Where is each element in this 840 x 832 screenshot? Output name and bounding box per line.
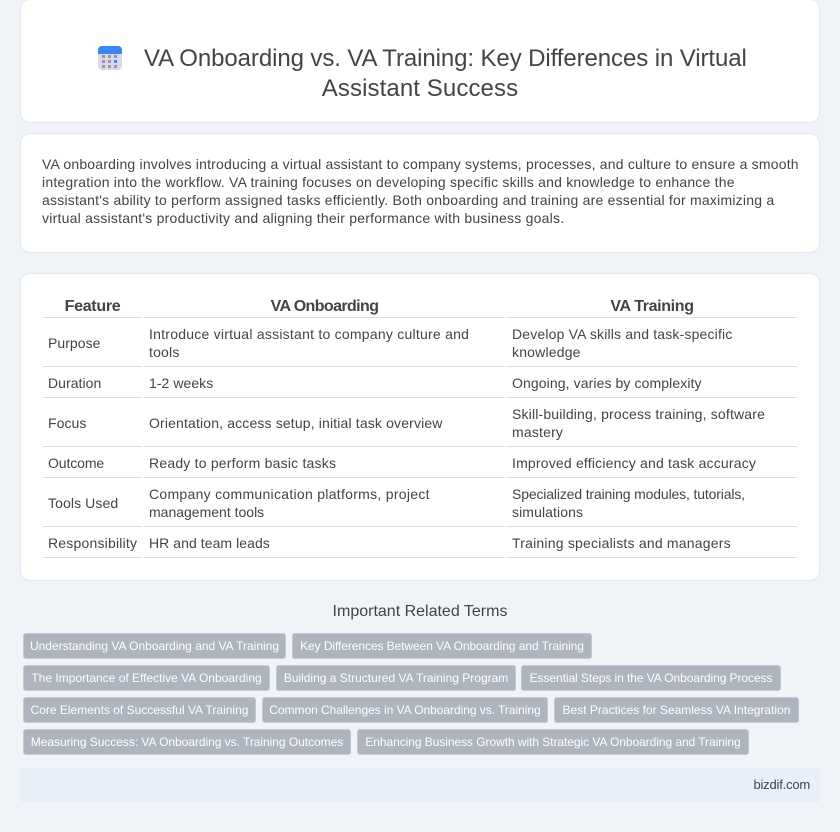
tag <box>23 697 256 723</box>
row: purpose: Introduce virtual assistant to company culture and <box>149 326 469 342</box>
tag: The Importance of Effective VA Onboarding <box>31 671 262 685</box>
tag: Core Elements of Successful VA Training <box>31 703 248 717</box>
intro text panel <box>20 133 820 253</box>
tag <box>357 729 749 755</box>
row: duration: Ongoing, varies by complexity <box>512 375 702 391</box>
row: focus: Orientation, access setup, initial task overview <box>149 415 443 431</box>
tag <box>276 665 516 691</box>
tag <box>23 729 351 755</box>
row: responsibility <box>48 535 731 551</box>
intro paragraph: virtual assistant's productivity and aligning their performance with business goals. <box>42 210 564 226</box>
title <box>144 45 747 102</box>
title: Assistant Success <box>322 75 518 102</box>
table header: VA training: VA Training <box>610 298 694 315</box>
table header: VA onboarding: VA Onboarding <box>271 298 378 315</box>
title: VA Onboarding vs. VA Training: Key Differences in Virtual <box>144 45 747 72</box>
row: duration: 1-2 weeks <box>149 375 213 391</box>
tag <box>262 697 548 723</box>
row: purpose: Develop VA skills and task-specific <box>512 326 732 342</box>
tag <box>521 665 781 691</box>
intro paragraph: VA onboarding involves introducing a virtual assistant to company systems, processes, and culture to ensure a smooth <box>42 156 799 172</box>
footer bar <box>20 768 820 802</box>
tag: Best Practices for Seamless VA Integration <box>563 703 790 717</box>
tag: Enhancing Business Growth with Strategic VA Onboarding and Training <box>365 735 741 749</box>
comparison table panel <box>20 273 820 581</box>
row: tools used: Specialized training modules, tutorials, <box>512 486 745 502</box>
row: purpose <box>48 326 732 360</box>
table header: feature: Feature <box>65 298 120 315</box>
related terms tags <box>23 633 799 755</box>
intro paragraph <box>42 156 799 226</box>
tag <box>23 665 270 691</box>
row: focus <box>48 406 765 440</box>
header card <box>20 0 820 123</box>
row: purpose: tools <box>149 344 180 360</box>
intro paragraph: integration into the workflow. VA training focuses on developing specific skills and knowledge to enhance the <box>42 174 735 190</box>
row: focus: mastery <box>512 424 563 440</box>
tag: Essential Steps in the VA Onboarding Process <box>530 671 772 685</box>
row: focus: Focus <box>48 415 86 431</box>
intro paragraph: assistant's ability to perform assigned tasks efficiently. Both onboarding and training are essential for maximizing a <box>42 192 774 208</box>
tag: Measuring Success: VA Onboarding vs. Training Outcomes <box>31 735 343 749</box>
tag <box>23 633 286 659</box>
row: outcome <box>48 455 756 471</box>
tag <box>554 697 799 723</box>
row: tools used <box>48 486 745 520</box>
row: tools used: Company communication platforms, project <box>149 486 430 502</box>
row: responsibility: HR and team leads <box>149 535 270 551</box>
row: tools used: simulations <box>512 504 583 520</box>
row: tools used: Tools Used <box>48 495 118 511</box>
icon: calendar <box>98 46 122 70</box>
row: focus: Skill-building, process training, software <box>512 406 765 422</box>
row: tools used: management tools <box>149 504 264 520</box>
row: outcome: Ready to perform basic tasks <box>149 455 336 471</box>
row: responsibility: Responsibility <box>48 535 137 551</box>
row: purpose: Purpose <box>48 335 100 351</box>
row: outcome: Outcome <box>48 455 104 471</box>
row: duration: Duration <box>48 375 101 391</box>
tag: Understanding VA Onboarding and VA Training <box>30 639 279 653</box>
row: duration <box>48 375 702 391</box>
tag: Building a Structured VA Training Program <box>284 671 508 685</box>
related terms heading: Important Related Terms <box>333 603 507 620</box>
tag <box>292 633 592 659</box>
tag: Key Differences Between VA Onboarding and Training <box>300 639 584 653</box>
row: purpose: knowledge <box>512 344 581 360</box>
row: responsibility: Training specialists and managers <box>512 535 731 551</box>
tag: Common Challenges in VA Onboarding vs. Training <box>269 703 541 717</box>
row: outcome: Improved efficiency and task accuracy <box>512 455 756 471</box>
footer source: bizdif.com <box>753 777 810 792</box>
